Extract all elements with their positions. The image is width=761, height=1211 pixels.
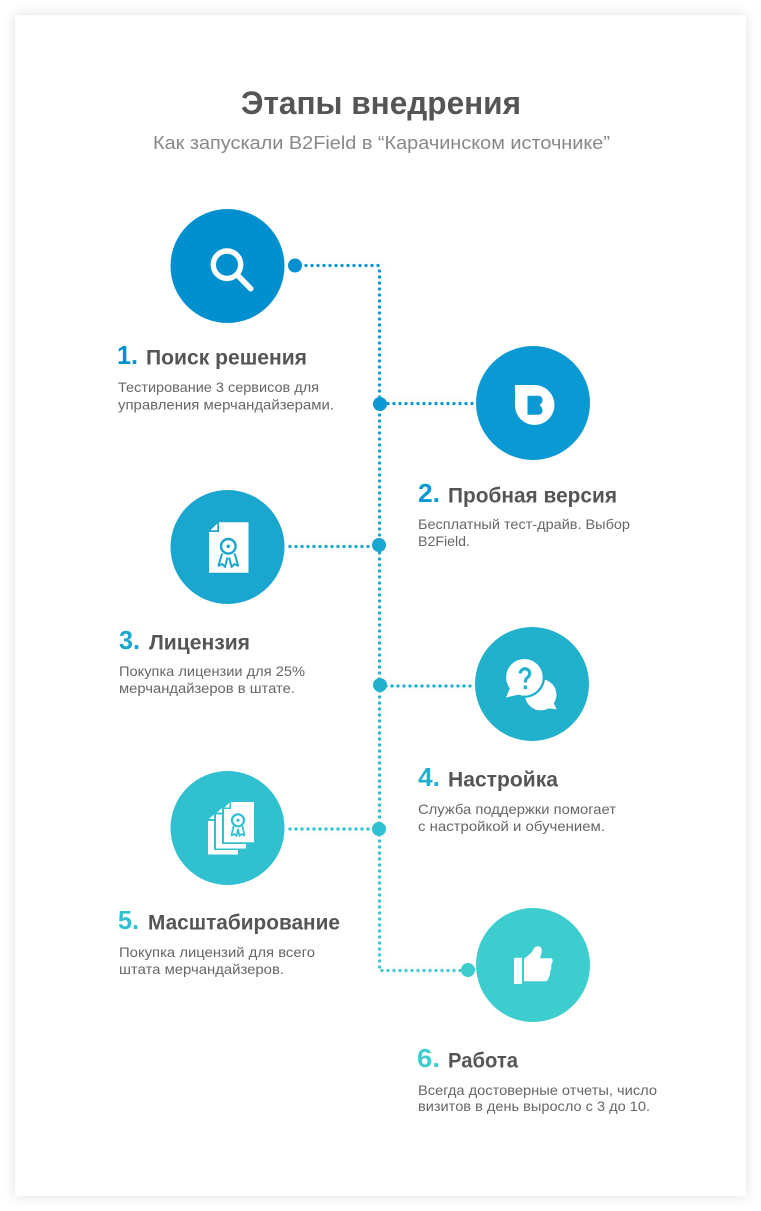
subtitle: Как запускали B2Field в “Карачинском источнике” [153,133,610,153]
step 1 heading: Поиск решения [146,346,307,370]
step 1 heading: 1. [117,340,138,370]
step 2 description [418,516,630,549]
step 5 description: штата мерчандайзеров. [119,961,284,977]
step 4 heading: 4. [418,762,440,792]
step 6 heading [417,1043,518,1073]
step 1 heading [117,340,307,370]
icon: chat bubbles [475,627,589,741]
step 3 heading: Лицензия [149,632,250,654]
step 1 description: управления мерчандайзерами. [118,396,334,412]
icon: thumbs up [476,908,590,1022]
step 2 description: Бесплатный тест-драйв. Выбор [418,516,630,532]
icon: B2Field logo [476,346,590,460]
step 5 description [119,944,315,977]
step 3 heading: 3. [119,625,140,655]
step 3 description [119,663,305,696]
icon: license document [170,490,284,604]
step 2: trial [418,346,630,549]
step 2 description: B2Field. [418,533,470,549]
step 5 heading: Масштабирование [148,912,340,934]
step 5 description: Покупка лицензий для всего [119,944,315,960]
step 1: search [117,209,334,412]
icon: document stack [170,771,284,885]
step 3 description: мерчандайзеров в штате. [119,680,295,696]
step 5 heading: 5. [118,905,139,935]
step 3 heading [119,625,250,655]
step 4 description [418,801,617,834]
step 4 heading: Настройка [448,768,558,792]
step 2 heading [418,478,617,508]
step 4 heading [418,762,558,792]
icon: magnifier [170,209,284,323]
step 6 heading: Работа [448,1050,518,1072]
step 4: setup [418,627,617,834]
title: Этапы внедрения [241,85,521,121]
step 5 heading [118,905,340,935]
timeline connector [288,258,476,977]
step 6 description: Всегда достоверные отчеты, число [418,1082,657,1098]
step 6 description: визитов в день выросло с 3 до 10. [418,1098,650,1114]
step 6: work [417,908,657,1114]
step 3 description: Покупка лицензии для 25% [119,663,305,679]
step 4 description: с настройкой и обучением. [418,818,605,834]
step 1 description: Тестирование 3 сервисов для [118,379,319,395]
step 3: license [119,490,305,696]
step 6 heading: 6. [417,1043,440,1073]
step 2 heading: Пробная версия [448,484,617,508]
step 2 heading: 2. [418,478,440,508]
step 1 description [118,379,334,412]
step 4 description: Служба поддержки помогает [418,801,617,817]
step 5: scaling [118,771,340,977]
step 6 description [418,1082,657,1114]
